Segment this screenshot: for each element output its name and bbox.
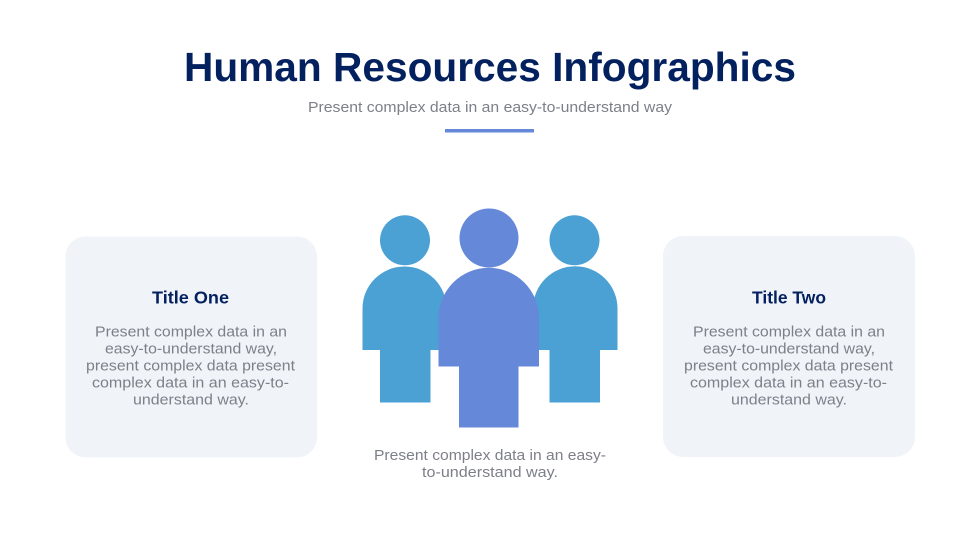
icon: left person [362, 215, 446, 402]
icon: right person [533, 215, 618, 402]
text block: center caption [374, 447, 606, 481]
text block: title two body: Present complex data in an [693, 324, 885, 340]
text block: center caption: to-understand way. [422, 464, 558, 481]
panel: title two [663, 236, 915, 457]
heading: title two: Title Two [752, 287, 826, 307]
icon: group of three people [362, 208, 618, 428]
text block: title two body: understand way. [731, 392, 847, 408]
title: Human Resources Infographics [184, 44, 796, 90]
text block: title two body: present complex data present [684, 358, 894, 374]
text block: title one body [86, 324, 296, 408]
text block: title one body: complex data in an easy-to- [92, 374, 289, 392]
panel: title one [66, 236, 317, 458]
text block: title one body: understand way. [133, 392, 249, 408]
subtitle: Present complex data in an easy-to-understand way [308, 99, 673, 116]
text block: title two body [684, 324, 894, 408]
text block: title one body: present complex data present [86, 358, 296, 374]
icon: center person [438, 208, 539, 428]
heading: title one: Title One [152, 287, 229, 307]
text block: title two body: complex data in an easy-to- [690, 374, 887, 392]
text block: title two body: easy-to-understand way, [703, 340, 875, 358]
text block: title one body: Present complex data in an [95, 324, 287, 340]
accent bar [445, 129, 534, 132]
text block: center caption: Present complex data in an easy- [374, 447, 606, 464]
text block: title one body: easy-to-understand way, [105, 340, 277, 358]
